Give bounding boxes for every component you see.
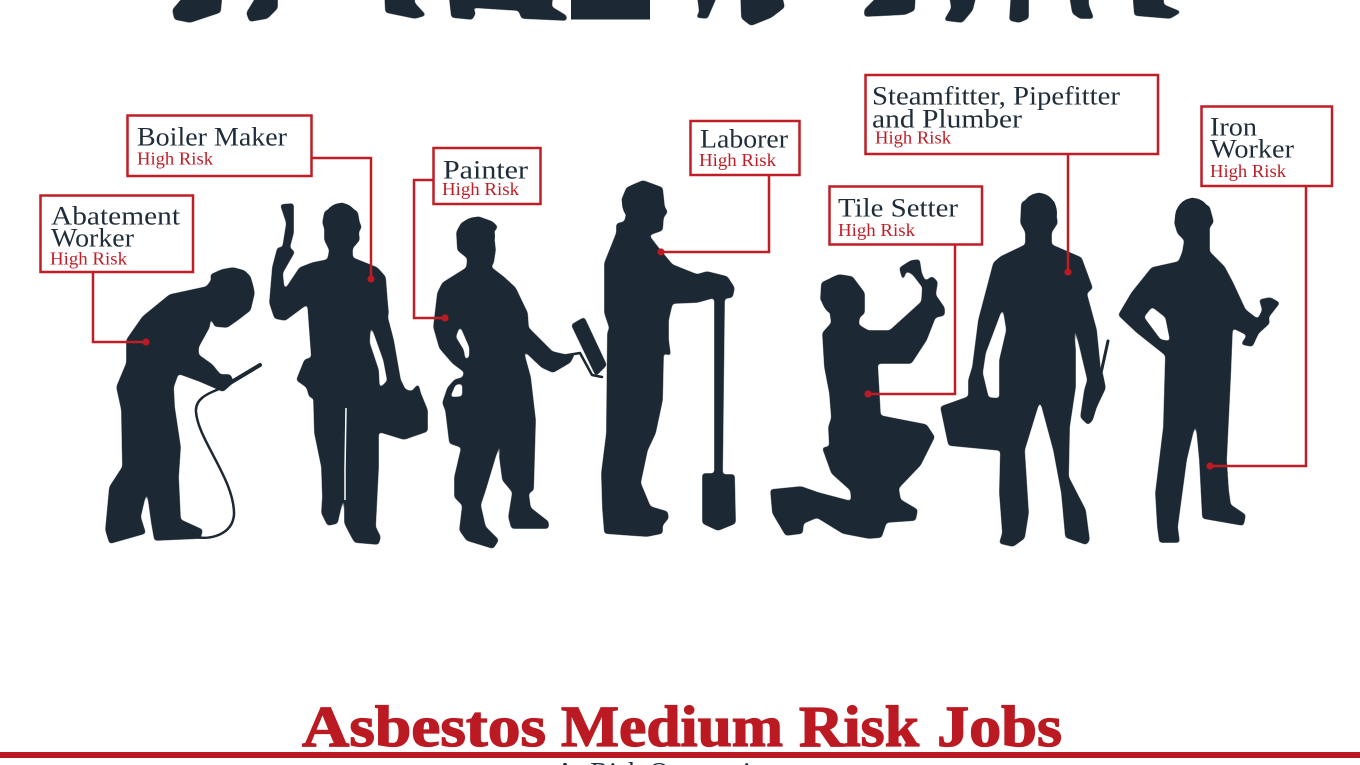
silhouette: laborer with shovel bbox=[602, 181, 735, 536]
callout: steamfitter, pipefitter and plumber: and Plumber bbox=[872, 104, 1022, 134]
callout: painter: Painter bbox=[443, 156, 528, 184]
callout: laborer: Laborer bbox=[700, 124, 788, 154]
callout: abatement worker: Worker bbox=[51, 224, 134, 252]
callout: boiler maker: Boiler Maker bbox=[137, 122, 287, 152]
silhouette: abatement worker bbox=[106, 268, 260, 543]
title bbox=[302, 694, 1062, 759]
callout: tile setter: High Risk bbox=[838, 220, 915, 240]
callout: boiler maker: High Risk bbox=[137, 148, 213, 168]
callout: abatement worker: High Risk bbox=[50, 248, 127, 268]
callout: boiler maker bbox=[128, 116, 375, 283]
callout: iron worker bbox=[1202, 106, 1332, 470]
title: Jobs bbox=[937, 694, 1062, 759]
cropped boots of previous row bbox=[173, 0, 1180, 25]
callout: tile setter: Tile Setter bbox=[838, 194, 958, 222]
silhouette: steamfitter, pipefitter and plumber bbox=[941, 193, 1108, 546]
callout: painter bbox=[414, 148, 540, 322]
title: Risk bbox=[799, 694, 920, 759]
title: Asbestos bbox=[302, 694, 546, 759]
callout: iron worker: Iron bbox=[1210, 112, 1257, 142]
callout: tile setter bbox=[830, 186, 982, 398]
callout: iron worker: Worker bbox=[1210, 134, 1294, 164]
silhouette: iron worker bbox=[1119, 198, 1279, 542]
silhouette: tile setter bbox=[771, 260, 944, 538]
callout: steamfitter, pipefitter and plumber: Steamfitter, Pipefitter bbox=[872, 82, 1120, 110]
silhouette: boiler maker bbox=[270, 203, 427, 544]
callout: painter: High Risk bbox=[442, 179, 519, 199]
callout: steamfitter, pipefitter and plumber: High Risk bbox=[875, 128, 951, 148]
callout: laborer bbox=[657, 121, 800, 256]
callout: steamfitter, pipefitter and plumber bbox=[866, 75, 1158, 276]
silhouette: painter bbox=[434, 217, 606, 548]
callout: iron worker: High Risk bbox=[1210, 161, 1286, 181]
callout: abatement worker bbox=[40, 196, 193, 346]
title: Medium bbox=[561, 694, 783, 759]
title rule bbox=[0, 752, 1360, 765]
callout: laborer: High Risk bbox=[699, 150, 776, 170]
callout: abatement worker: Abatement bbox=[51, 202, 181, 230]
